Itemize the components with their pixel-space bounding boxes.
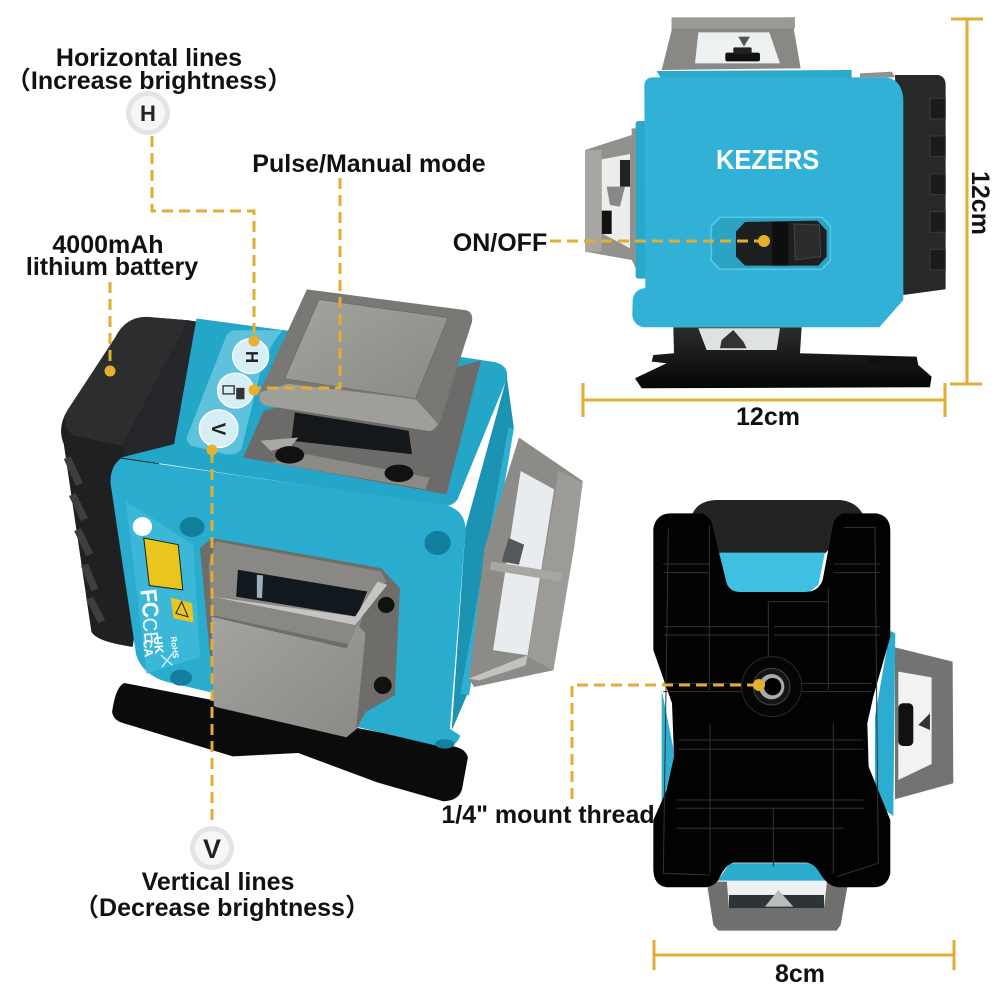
top face bbox=[121, 319, 507, 506]
side view top bracket bbox=[662, 17, 801, 70]
label: mount thread: 1/4" mount thread bbox=[441, 801, 655, 829]
right blue strip bbox=[875, 631, 895, 816]
battery top bbox=[693, 500, 863, 553]
label: battery: 4000mAh bbox=[52, 231, 164, 259]
label sticker: UK bbox=[150, 636, 166, 655]
blue top strip bbox=[657, 70, 852, 79]
dimension: height 12cm: 12cm bbox=[966, 171, 994, 235]
icon: H badge: H bbox=[140, 101, 156, 126]
top metal bracket bbox=[243, 289, 481, 494]
side body bbox=[632, 77, 903, 327]
label: vertical lines bbox=[74, 868, 370, 922]
icon: V badge: V bbox=[203, 834, 221, 864]
right face strip bbox=[460, 427, 514, 695]
icon: H badge bbox=[126, 91, 170, 135]
left blue tab bbox=[636, 121, 647, 279]
label sticker: CE bbox=[137, 617, 162, 646]
dimension: width 12cm: 12cm bbox=[736, 403, 800, 431]
right metal bracket bbox=[469, 437, 583, 687]
screw holes bbox=[170, 517, 454, 749]
dimension: width 12cm bbox=[583, 383, 945, 431]
label sticker: CA bbox=[140, 639, 156, 658]
power switch bbox=[711, 217, 830, 269]
certification text: FC bbox=[135, 588, 164, 619]
yellow caution label bbox=[144, 538, 183, 590]
label sticker bbox=[126, 501, 200, 674]
base ribs bbox=[663, 525, 880, 877]
front metal bracket bbox=[200, 538, 400, 737]
dimension: width 8cm: 8cm bbox=[775, 960, 825, 988]
title: horizontal lines: （Increase brightness） bbox=[6, 67, 292, 95]
battery pack bbox=[61, 317, 229, 647]
brand name: KEZERS bbox=[716, 144, 819, 175]
bottom bracket bbox=[707, 879, 848, 931]
base foot bbox=[635, 327, 932, 388]
H button: H bbox=[242, 351, 261, 363]
label: vertical lines: Vertical lines bbox=[142, 868, 294, 896]
mount thread bbox=[742, 657, 802, 717]
title: horizontal lines: Horizontal lines bbox=[56, 44, 242, 72]
callout: power line bbox=[550, 235, 770, 247]
left blue sliver bbox=[662, 690, 675, 808]
callout: battery line bbox=[104, 282, 116, 376]
front face bbox=[111, 459, 465, 747]
label: battery: lithium battery bbox=[26, 253, 198, 281]
title: horizontal lines bbox=[6, 44, 292, 95]
bottom view device bbox=[653, 500, 953, 931]
main laser level device bbox=[61, 289, 583, 801]
label: on/off: ON/OFF bbox=[453, 229, 547, 257]
mode button bbox=[218, 373, 253, 408]
callout: V button line bbox=[206, 444, 218, 826]
battery side bbox=[860, 72, 946, 295]
callout: thread line bbox=[572, 679, 765, 800]
callout: H button line bbox=[152, 136, 260, 346]
icon: V badge bbox=[190, 826, 234, 870]
button panel bbox=[187, 330, 283, 455]
V button: V bbox=[207, 423, 228, 436]
label: battery bbox=[26, 231, 198, 281]
label sticker: RoHS bbox=[169, 636, 180, 659]
right face bbox=[452, 377, 514, 731]
side view device bbox=[585, 17, 946, 388]
top blue section bbox=[719, 553, 825, 593]
bottom blue section bbox=[717, 863, 827, 881]
label: vertical lines: （Decrease brightness） bbox=[74, 894, 370, 922]
right bracket bbox=[895, 647, 953, 799]
dimension: height 12cm bbox=[950, 19, 994, 384]
black base plate bbox=[653, 513, 890, 887]
callout: mode line bbox=[248, 178, 340, 396]
label: pulse manual mode: Pulse/Manual mode bbox=[252, 150, 486, 178]
left bracket bbox=[585, 128, 638, 273]
base plate bbox=[112, 683, 468, 801]
warning triangle label bbox=[171, 598, 193, 622]
dimension: width 8cm bbox=[654, 940, 954, 988]
